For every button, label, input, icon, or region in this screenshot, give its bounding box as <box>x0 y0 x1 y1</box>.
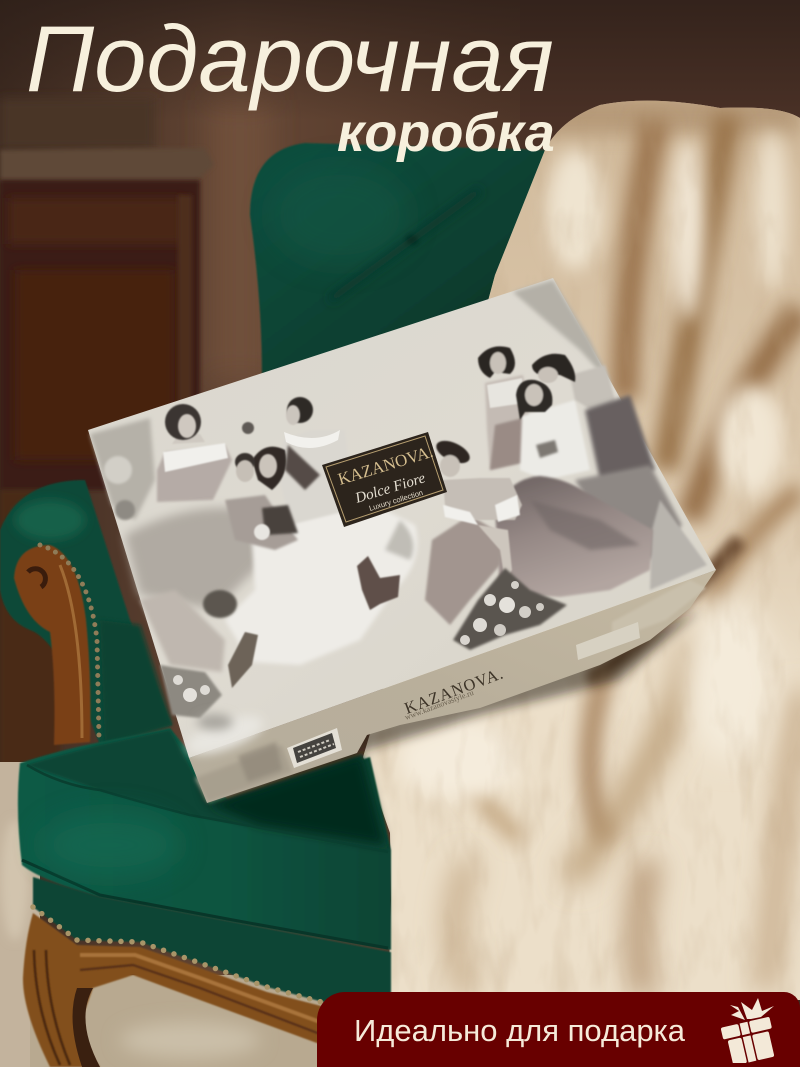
faded skirts <box>125 508 265 610</box>
brand label on lid: Dolce Fiore <box>353 470 428 507</box>
heads and hair <box>433 346 575 477</box>
box QR code <box>287 728 342 768</box>
rear skirt <box>575 465 682 560</box>
armchair lower rail <box>33 877 391 1002</box>
armchair arm <box>0 480 172 745</box>
standing lady <box>485 375 530 470</box>
gift box shadow <box>200 610 700 803</box>
seated ladies <box>225 447 298 550</box>
armchair wooden legs and rail <box>23 907 325 1067</box>
left lady <box>157 404 232 502</box>
title: first line: Подарочная <box>26 6 554 111</box>
big dress <box>495 476 653 597</box>
armchair wooden arm support <box>14 545 99 745</box>
gift box <box>88 278 716 803</box>
antique cabinet <box>0 98 214 490</box>
brand label on lid: KAZANOVA. <box>336 442 435 489</box>
title: second line: коробка <box>337 103 555 163</box>
lid illustration: floral corners <box>90 280 612 762</box>
brand label on lid: Luxury collection <box>368 488 424 513</box>
lid illustration: left group of ladies <box>125 397 418 688</box>
armchair seat cushion <box>18 728 391 950</box>
patterned gown <box>585 395 655 480</box>
fur throw <box>340 90 800 1010</box>
bouquet and shoes <box>203 590 237 618</box>
armchair back <box>250 143 560 375</box>
icon: gift box <box>721 998 774 1063</box>
left dress <box>425 515 503 625</box>
veil <box>650 500 707 590</box>
white gown <box>520 400 590 480</box>
box lid <box>88 278 716 758</box>
seated lady torso <box>443 478 522 520</box>
floor and rug <box>0 490 330 1067</box>
box side brand text: www.kazanovastyle.ru <box>404 688 475 722</box>
lid illustration: right group of ladies <box>425 346 707 650</box>
standing lady <box>242 397 350 525</box>
box side panel <box>189 570 716 803</box>
brand label on lid <box>322 432 447 527</box>
banner text: Идеально для подарка <box>354 1013 685 1048</box>
banner: ideal for a gift <box>317 992 800 1067</box>
bouquet <box>453 568 567 650</box>
box side brand text: KAZANOVA. <box>402 663 506 718</box>
